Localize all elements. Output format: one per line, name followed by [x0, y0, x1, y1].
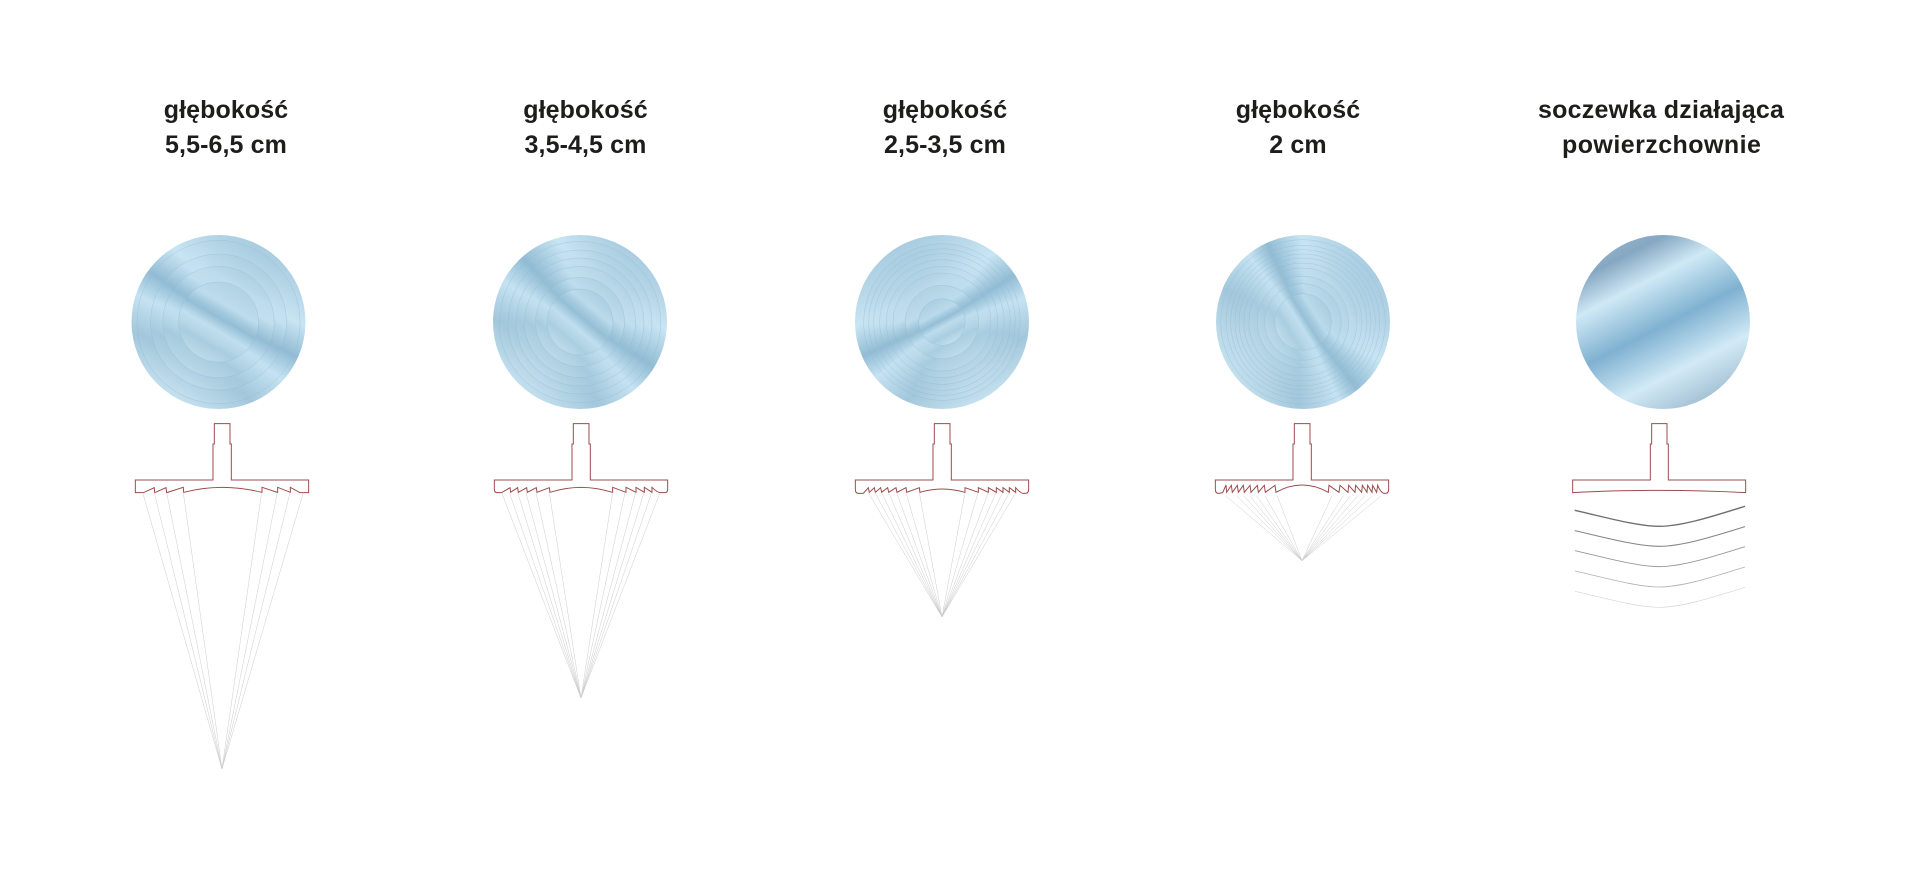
- heading: depth 2.5-3.5 cm: głębokość: [883, 96, 1007, 124]
- lens disc: smooth: [1576, 235, 1750, 409]
- heading: depth 5.5-6.5 cm: [164, 96, 288, 159]
- lens cross-section profile: [494, 424, 668, 493]
- heading: depth 3.5-4.5 cm: głębokość: [523, 96, 648, 124]
- lens disc: four rings: [132, 235, 306, 409]
- lens cross-section profile: [1215, 424, 1389, 493]
- column: depth 2.5-3.5 cm: [855, 96, 1029, 617]
- focal rays converging at 5.5-6.5 cm: [143, 493, 303, 769]
- focal rays converging at 2.5-3.5 cm: [868, 493, 1016, 617]
- column: depth 5.5-6.5 cm: [132, 96, 309, 769]
- heading: depth 5.5-6.5 cm: 5,5-6,5 cm: [165, 131, 287, 159]
- focal rays converging at 2 cm: [1226, 496, 1381, 561]
- heading: depth 3.5-4.5 cm: [523, 96, 648, 159]
- heading: depth 2 cm: 2 cm: [1269, 131, 1327, 159]
- heading: depth 3.5-4.5 cm: 3,5-4,5 cm: [525, 131, 646, 159]
- focal rays converging at 3.5-4.5 cm: [502, 493, 660, 698]
- heading: surface-acting lens: [1538, 96, 1785, 159]
- lens cross-section profile: [855, 424, 1029, 493]
- column: surface-acting lens: [1538, 96, 1785, 607]
- heading: depth 5.5-6.5 cm: głębokość: [164, 96, 288, 124]
- heading: depth 2 cm: [1236, 96, 1360, 159]
- column: depth 2 cm: [1215, 96, 1390, 561]
- lens cross-section profile: [135, 424, 309, 493]
- heading: surface-acting lens: powierzchownie: [1562, 131, 1761, 159]
- heading: depth 2.5-3.5 cm: 2,5-3,5 cm: [884, 131, 1006, 159]
- lens cross-section profile: [1573, 424, 1746, 493]
- lens disc: eleven rings: [1216, 235, 1390, 409]
- heading: depth 2.5-3.5 cm: [883, 96, 1007, 159]
- surface waves: [1575, 506, 1745, 607]
- lens disc: seven rings: [493, 235, 667, 409]
- lens disc: nine rings: [855, 235, 1029, 409]
- heading: surface-acting lens: soczewka działająca: [1538, 96, 1785, 124]
- column: depth 3.5-4.5 cm: [493, 96, 668, 698]
- heading: depth 2 cm: głębokość: [1236, 96, 1360, 124]
